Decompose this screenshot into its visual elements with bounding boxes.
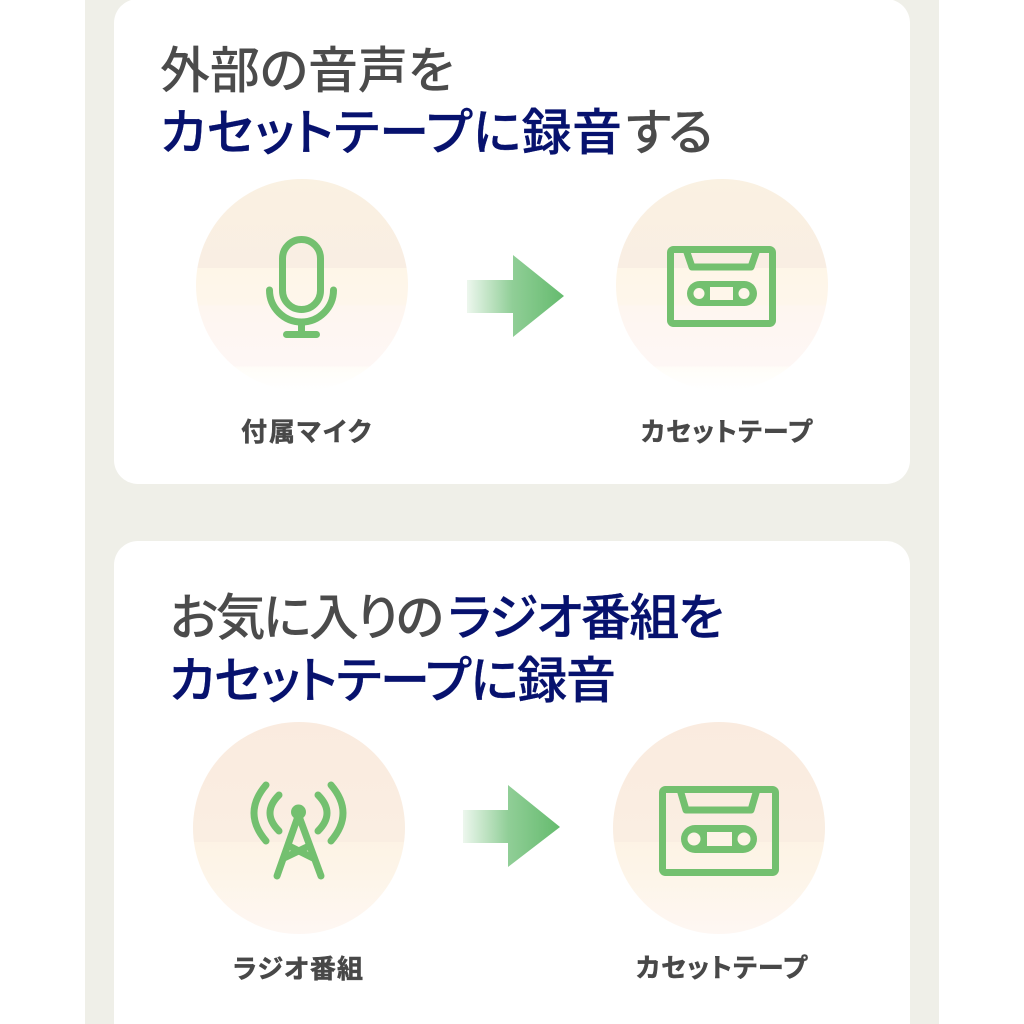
label: cassette tape: カセットテープ (641, 417, 813, 447)
panel: radio programme recording (114, 541, 910, 1024)
circle: cassette background (613, 722, 825, 934)
heading: external audio recording: カセットテープに録音 (160, 105, 622, 161)
icon: cassette tape (662, 790, 776, 872)
circle: microphone background (196, 179, 408, 391)
heading: radio programme recording: カセットテープに録音 (169, 653, 616, 709)
label: radio programme: ラジオ番組 (233, 954, 363, 984)
panel: external audio recording (114, 0, 910, 484)
heading: radio programme recording: ラジオ番組を (448, 590, 724, 646)
heading: external audio recording: する (626, 105, 713, 161)
heading: external audio recording: 外部の音声を (160, 43, 454, 99)
icon: cassette tape (670, 250, 772, 324)
heading: external audio recording (160, 43, 713, 161)
heading: radio programme recording: お気に入りの (170, 590, 444, 646)
circle: radio background (193, 722, 405, 934)
icon: microphone (270, 240, 334, 334)
icon: radio tower (254, 785, 343, 876)
circle: cassette background (616, 179, 828, 391)
arrow: radio to cassette (463, 785, 560, 867)
heading: radio programme recording (169, 590, 724, 709)
label: cassette tape: カセットテープ (636, 953, 808, 983)
label: built-in mic: 付属マイク (241, 417, 371, 447)
arrow: microphone to cassette (467, 255, 564, 337)
